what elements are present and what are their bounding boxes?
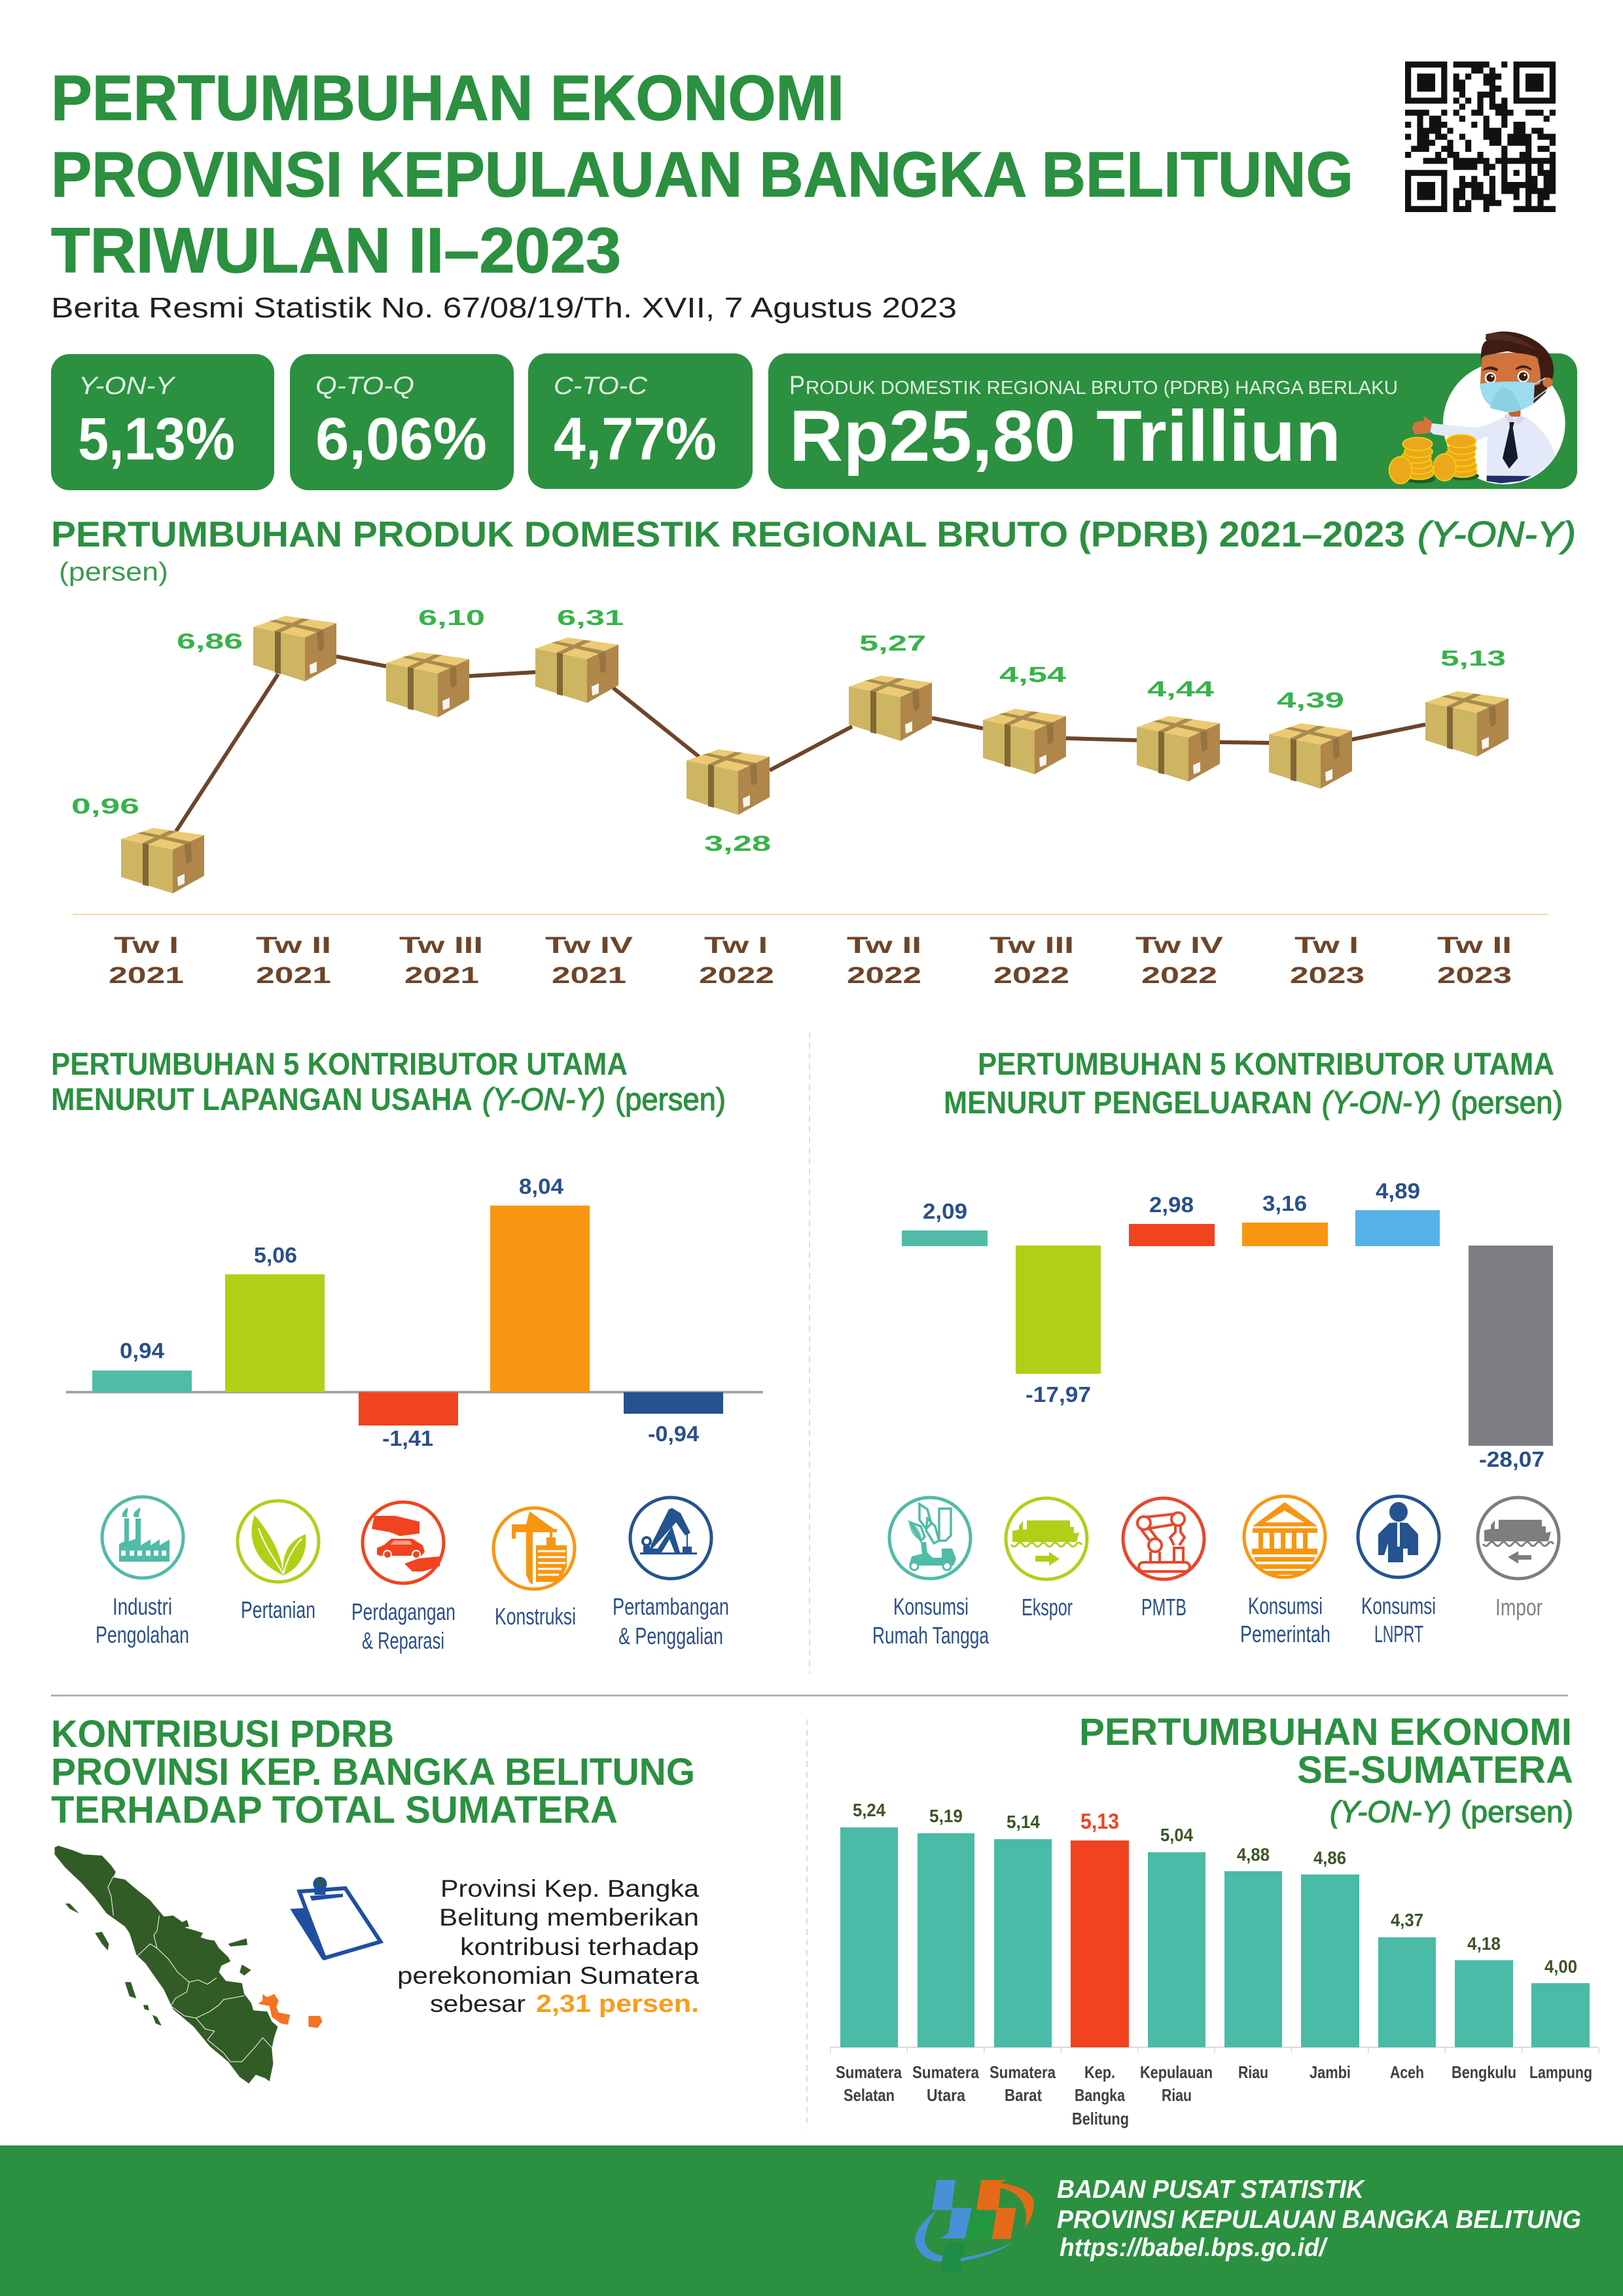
labels: industries: Pertanian <box>241 1596 315 1623</box>
data labels: 3,28 <box>704 831 771 855</box>
data labels: 6,10 <box>418 605 485 630</box>
text block: contribution statement: perekonomian Sumatera <box>397 1962 699 1989</box>
labels: expenditure components: LNPRT <box>1374 1621 1423 1647</box>
PDRB label: RODUK DOMESTIK REGIONAL BRUTO (PDRB) HARGA BERLAKU <box>806 378 1398 399</box>
province labels: Kepulauan <box>1140 2062 1213 2082</box>
data labels: 6,31 <box>557 605 624 630</box>
axis labels: Tw IV <box>1135 933 1224 958</box>
province labels: Aceh <box>1390 2062 1424 2082</box>
province labels: Bangka <box>1075 2085 1125 2105</box>
heading: growth across Sumatra: (Y-ON-Y) <box>1330 1795 1452 1829</box>
heading: contributors by industry: PERTUMBUHAN 5 KONTRIBUTOR UTAMA <box>51 1047 628 1082</box>
bar chart: provinces in Sumatra <box>830 1800 1599 2128</box>
unit label: persen: (persen) <box>59 558 168 586</box>
heading: growth across Sumatra: PERTUMBUHAN EKONOMI <box>1079 1711 1572 1753</box>
bar chart: by industry: 0,94 <box>120 1338 165 1363</box>
province labels: Kep. <box>1084 2062 1115 2082</box>
bar chart: by industry: -0,94 <box>648 1422 700 1446</box>
labels: industries: Industri <box>113 1593 172 1620</box>
heading: contribution to Sumatra <box>51 1713 695 1831</box>
province labels <box>836 2062 1592 2128</box>
axis labels: Tw III <box>990 933 1074 958</box>
labels: industries: Perdagangan <box>351 1598 455 1625</box>
data labels <box>71 605 1506 855</box>
bar values: 4,37 <box>1391 1910 1423 1930</box>
bar chart: by expenditure: 2,98 <box>1149 1193 1194 1217</box>
title <box>51 62 1353 286</box>
heading: contribution to Sumatra: KONTRIBUSI PDRB <box>51 1713 394 1755</box>
province labels: Utara <box>927 2085 965 2105</box>
footer band <box>0 2145 1623 2296</box>
data labels: 4,44 <box>1147 677 1215 701</box>
footer text: BADAN PUSAT STATISTIK <box>1057 2176 1366 2204</box>
KPI card: Q-TO-Q: Q-TO-Q <box>315 372 414 400</box>
heading: PDRB growth: (Y-ON-Y) <box>1418 514 1576 554</box>
axis labels: 2022 <box>993 963 1069 988</box>
text block: contribution statement: sebesar <box>430 1990 526 2017</box>
logo: BPS <box>915 2180 1034 2272</box>
heading: contributors by expenditure <box>944 1047 1563 1121</box>
province labels: Sumatera <box>912 2062 979 2082</box>
subtitle: release number: Berita Resmi Statistik No. 67/08/19/Th. XVII, 7 Agustus 2023 <box>51 292 957 324</box>
trend line <box>176 656 1425 831</box>
province labels: Lampung <box>1529 2062 1592 2082</box>
bars <box>840 1827 1590 2047</box>
bar values: 4,00 <box>1544 1956 1577 1977</box>
KPI card: C-TO-C <box>528 353 753 489</box>
province labels: Sumatera <box>990 2062 1056 2082</box>
map: Sumatra <box>54 1846 322 2083</box>
labels: expenditure components: Konsumsi <box>1361 1592 1436 1619</box>
KPI card: Y-ON-Y: 5,13% <box>78 406 235 473</box>
KPI card: C-TO-C: 4,77% <box>554 406 717 473</box>
labels: expenditure components: Impor <box>1495 1594 1543 1621</box>
highlight: Bangka Belitung <box>258 1994 322 2028</box>
icon: export ship <box>1006 1498 1087 1579</box>
labels: industries: Konstruksi <box>495 1603 576 1630</box>
heading: PDRB growth: PERTUMBUHAN PRODUK DOMESTIK REGIONAL BRUTO (PDRB) 2021–2023 <box>51 514 1405 554</box>
text block: contribution statement: Provinsi Kep. Bangka <box>440 1875 699 1902</box>
KPI card: Y-ON-Y: Y-ON-Y <box>79 372 176 400</box>
province labels: Jambi <box>1310 2062 1351 2082</box>
labels: expenditure components <box>872 1592 1543 1649</box>
KPI card: Y-ON-Y <box>51 354 274 490</box>
heading: contributors by industry: MENURUT LAPANGAN USAHA <box>51 1083 473 1117</box>
icon: crane and building <box>493 1508 575 1589</box>
box markers <box>121 616 1508 893</box>
icon: businessman with coins <box>1389 332 1565 484</box>
text block: contribution statement: kontribusi terhadap <box>460 1933 699 1960</box>
title: PERTUMBUHAN EKONOMI <box>51 62 844 134</box>
icon: trade and car <box>363 1502 444 1583</box>
heading: growth across Sumatra: SE-SUMATERA <box>1297 1749 1573 1791</box>
heading: contributors by expenditure: (persen) <box>1451 1086 1563 1121</box>
labels: industries: Pengolahan <box>96 1621 189 1648</box>
labels: industries <box>96 1593 729 1654</box>
KPI card: C-TO-C: C-TO-C <box>554 372 648 400</box>
labels: expenditure components: PMTB <box>1141 1594 1186 1621</box>
bar values: 4,88 <box>1237 1844 1270 1865</box>
icon: robot arm <box>1123 1498 1204 1579</box>
bar chart: by expenditure: -17,97 <box>1026 1382 1091 1407</box>
KPI card: Q-TO-Q <box>290 354 514 490</box>
bar chart: by expenditure: 2,09 <box>923 1199 967 1223</box>
heading: contributors by expenditure: MENURUT PENGELUARAN <box>944 1086 1312 1121</box>
axis labels: 2021 <box>404 963 479 988</box>
axis labels: 2021 <box>256 963 331 988</box>
heading: contribution to Sumatra: PROVINSI KEP. BANGKA BELITUNG <box>51 1751 695 1793</box>
icon: oil pump <box>630 1498 711 1579</box>
axis labels: 2023 <box>1437 963 1512 988</box>
labels: industries: & Penggalian <box>618 1623 723 1649</box>
data labels: 5,27 <box>859 631 926 655</box>
QR code <box>1405 62 1556 212</box>
icon: government building <box>1244 1496 1325 1577</box>
bar values <box>853 1800 1577 1977</box>
heading: contributors by expenditure: PERTUMBUHAN 5 KONTRIBUTOR UTAMA <box>978 1047 1554 1082</box>
KPI card: Q-TO-Q: 6,06% <box>315 406 487 473</box>
title: PROVINSI KEPULAUAN BANGKA BELITUNG <box>51 139 1353 210</box>
axis labels: Tw II <box>847 933 921 958</box>
province labels: Bengkulu <box>1452 2062 1516 2082</box>
data labels: 4,39 <box>1277 688 1344 712</box>
labels: expenditure components: Rumah Tangga <box>872 1622 990 1649</box>
bar chart: by expenditure: 4,89 <box>1376 1179 1420 1203</box>
bar values: 5,24 <box>853 1800 885 1820</box>
labels: expenditure components: Pemerintah <box>1240 1621 1330 1647</box>
data labels: 4,54 <box>999 662 1067 687</box>
PDRB label <box>789 371 1398 400</box>
highlight value: 2,31 persen. <box>536 1990 699 2018</box>
heading: contributors by expenditure: (Y-ON-Y) <box>1322 1086 1441 1121</box>
heading: growth across Sumatra: (persen) <box>1461 1795 1573 1829</box>
axis labels: 2023 <box>1290 963 1364 988</box>
data labels: 5,13 <box>1440 646 1506 670</box>
bar values: 4,18 <box>1467 1933 1501 1954</box>
labels: industries: Pertambangan <box>613 1593 729 1620</box>
bar chart: by expenditure: 3,16 <box>1262 1191 1307 1215</box>
province labels: Selatan <box>844 2085 895 2105</box>
PDRB value: Rp25,80 Trilliun <box>789 396 1341 476</box>
province labels: Belitung <box>1072 2109 1129 2128</box>
labels: expenditure components: Ekspor <box>1022 1594 1073 1621</box>
footer text <box>1057 2176 1581 2262</box>
axis labels: Tw I <box>704 933 768 958</box>
bar chart: by expenditure: -28,07 <box>1479 1447 1544 1471</box>
KPI card: PDRB value <box>768 332 1577 489</box>
bar values: 5,13 <box>1080 1809 1119 1833</box>
axis labels: Tw I <box>1294 933 1359 958</box>
text block: contribution statement <box>397 1875 699 2018</box>
axis labels <box>109 933 1512 988</box>
axis labels: 2022 <box>847 963 921 988</box>
labels: expenditure components: Konsumsi <box>893 1593 969 1620</box>
axis labels: 2022 <box>699 963 774 988</box>
bar chart: by industry <box>66 1174 763 1450</box>
province labels: Riau <box>1162 2085 1192 2105</box>
heading: contribution to Sumatra: TERHADAP TOTAL SUMATERA <box>51 1789 618 1831</box>
axis labels: Tw II <box>1437 933 1512 958</box>
footer text: https://babel.bps.go.id/ <box>1060 2234 1329 2262</box>
data labels: 6,86 <box>177 629 243 653</box>
axis labels: 2021 <box>109 963 184 988</box>
axis labels: Tw IV <box>545 933 633 958</box>
province labels: Barat <box>1005 2085 1042 2105</box>
line chart: PDRB growth with box markers <box>71 605 1548 988</box>
bar chart: by industry: 8,04 <box>519 1174 564 1198</box>
icon: import ship <box>1478 1498 1559 1579</box>
icon: nonprofit person <box>1358 1496 1439 1577</box>
heading: contributors by industry: (Y-ON-Y) <box>482 1083 605 1117</box>
icon: leaves <box>238 1501 319 1582</box>
labels: expenditure components: Konsumsi <box>1248 1592 1323 1619</box>
bar chart: by expenditure <box>902 1179 1553 1471</box>
province labels: Riau <box>1238 2062 1268 2082</box>
axis labels: Tw III <box>399 933 483 958</box>
title: TRIWULAN II–2023 <box>51 215 621 286</box>
heading: growth across Sumatra <box>1079 1711 1573 1829</box>
icon: household consumption <box>889 1498 971 1579</box>
axis labels: 2022 <box>1141 963 1217 988</box>
PDRB label: P <box>789 371 805 400</box>
bar values: 5,04 <box>1160 1825 1193 1845</box>
text block: contribution statement: Belitung memberikan <box>439 1904 699 1931</box>
bar values: 5,19 <box>929 1806 963 1826</box>
axis labels: Tw II <box>256 933 331 958</box>
labels: industries: & Reparasi <box>362 1627 444 1654</box>
heading: contributors by industry <box>51 1047 726 1117</box>
data labels: 0,96 <box>71 794 139 818</box>
bar values: 5,14 <box>1007 1812 1040 1832</box>
footer text: PROVINSI KEPULAUAN BANGKA BELITUNG <box>1057 2206 1581 2234</box>
bar chart: by industry: -1,41 <box>382 1426 433 1450</box>
province labels: Sumatera <box>836 2062 902 2082</box>
bar values: 4,86 <box>1313 1848 1346 1868</box>
icon: factory <box>102 1497 183 1578</box>
icon: clipboard <box>290 1877 381 1960</box>
axis labels: 2021 <box>552 963 626 988</box>
axis labels: Tw I <box>114 933 179 958</box>
bar chart: by industry: 5,06 <box>254 1243 297 1267</box>
heading: contributors by industry: (persen) <box>615 1083 726 1117</box>
